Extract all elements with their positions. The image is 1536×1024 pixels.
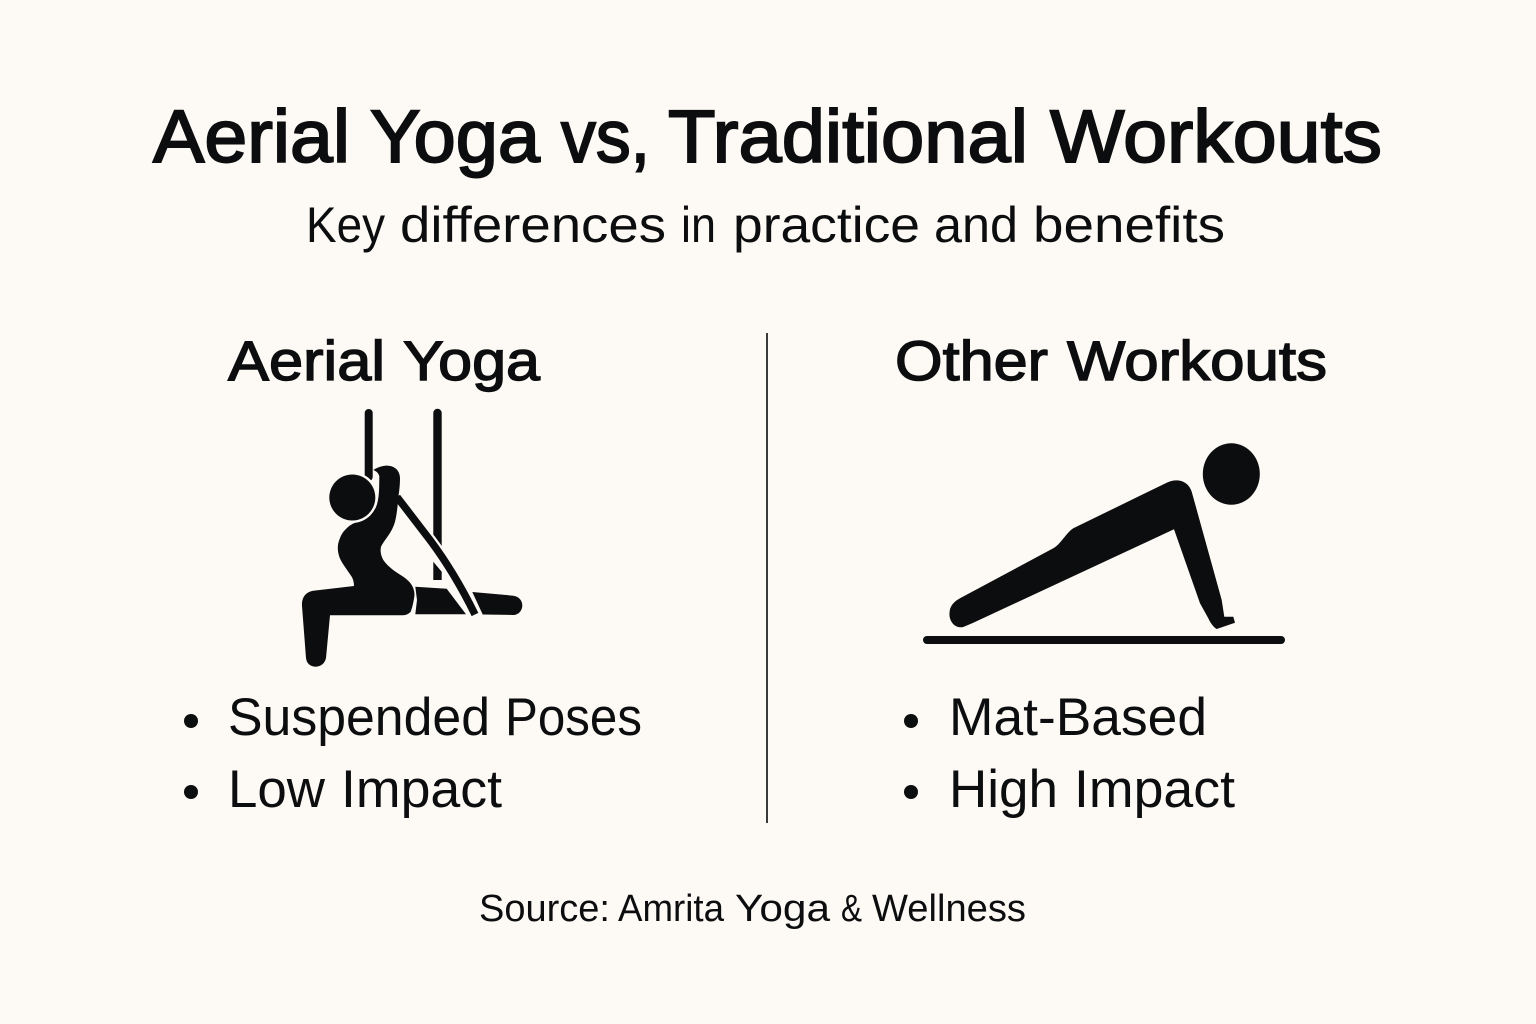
title: Traditional [668, 95, 1028, 178]
bullet: low impact: Low [228, 760, 326, 819]
source note: Source: [479, 888, 610, 930]
source note: Yoga [735, 888, 831, 930]
bullet: low impact: Impact [341, 760, 502, 819]
bullet: low impact [184, 760, 502, 819]
bullet: suspended poses: Suspended [228, 688, 490, 747]
bullet: mat-based: Mat-Based [949, 688, 1207, 747]
title: vs, [561, 95, 650, 178]
bullet: suspended poses: Poses [505, 688, 642, 747]
panel: aerial yoga [184, 329, 642, 819]
subtitle: in [681, 197, 716, 253]
source note: Amrita [618, 888, 725, 930]
subtitle: benefits [1033, 197, 1225, 253]
heading: other workouts: Other [895, 329, 1048, 392]
heading: aerial yoga: Yoga [403, 329, 541, 392]
bullet: high impact: High [949, 760, 1058, 819]
icon: aerial yoga figure in hammock [302, 409, 522, 667]
source note: & [841, 888, 862, 930]
heading: aerial yoga: Aerial [228, 329, 385, 392]
title: Workouts [1050, 95, 1382, 178]
title: Yoga [370, 95, 541, 178]
icon: push-up figure on floor [923, 443, 1285, 644]
subtitle: differences [400, 197, 666, 253]
bullet: high impact: Impact [1074, 760, 1235, 819]
panel: other workouts [895, 329, 1327, 819]
heading: other workouts: Workouts [1067, 329, 1327, 392]
bullet: high impact [904, 760, 1235, 819]
title: Aerial [153, 95, 350, 178]
subtitle: practice [733, 197, 920, 253]
subtitle: and [934, 197, 1018, 253]
source note: Wellness [872, 888, 1026, 930]
bullet: suspended poses [184, 688, 642, 747]
subtitle: Key [306, 197, 385, 253]
